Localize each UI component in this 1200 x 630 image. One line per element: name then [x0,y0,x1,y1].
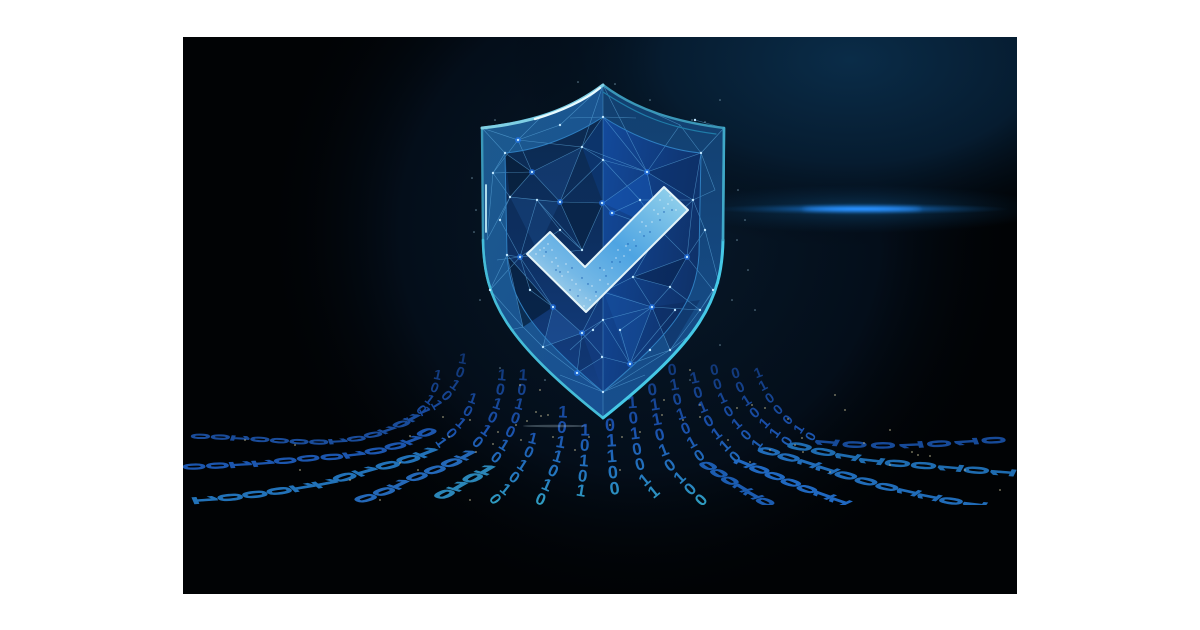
check mark texture [536,196,676,306]
shield inner panels [505,117,701,392]
right binary wings [699,436,1017,505]
light flare at shield base [523,425,587,427]
right binary columns [606,364,816,505]
left binary wings: 1000100 [354,450,476,502]
shield [482,85,724,418]
horizontal light beam [724,190,1017,228]
illustration: shield over binary data streams [183,37,1017,594]
check mark [527,187,688,312]
rim edge highlights [482,85,724,418]
glowing mesh nodes [490,117,713,392]
binary data streams [183,353,1017,505]
dark background with blue glow [183,37,1017,594]
left binary wings [183,414,496,504]
polygon facets [505,117,701,392]
left binary columns [406,353,590,505]
left binary wings: 1010 [434,465,496,499]
shield rim [482,85,724,418]
floating dust particles [245,360,1000,500]
mesh network lines [482,85,724,418]
